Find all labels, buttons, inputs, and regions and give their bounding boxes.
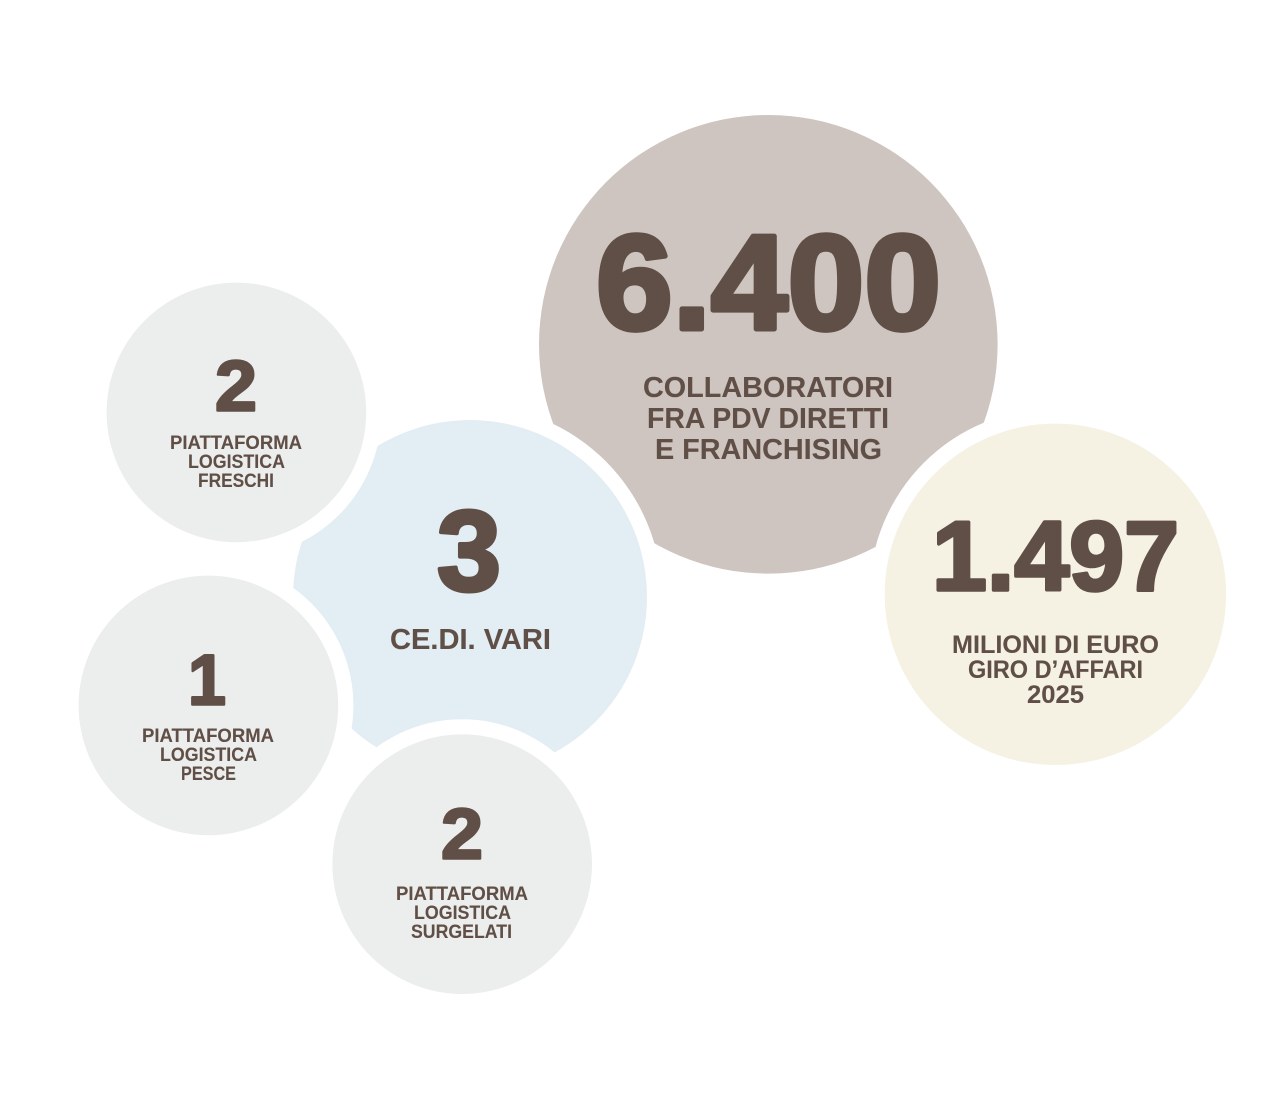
label: pesce: LOGISTICA bbox=[160, 745, 257, 766]
big number: 3: 3 bbox=[437, 488, 501, 615]
label: ce.di. vari: CE.DI. VARI bbox=[390, 624, 551, 656]
label: giro d'affari: 2025 bbox=[1027, 681, 1084, 709]
number: 2 surgelati: 2 bbox=[441, 796, 483, 874]
label: collaboratori: E FRANCHISING bbox=[655, 434, 882, 466]
label: surgelati: SURGELATI bbox=[411, 922, 512, 943]
label: pesce bbox=[142, 726, 274, 785]
label: giro d'affari: GIRO D’AFFARI bbox=[968, 656, 1143, 684]
label: surgelati: LOGISTICA bbox=[414, 903, 511, 924]
label: collaboratori bbox=[643, 372, 893, 466]
label: surgelati: PIATTAFORMA bbox=[396, 884, 528, 905]
label: giro d'affari: MILIONI DI EURO bbox=[952, 631, 1159, 659]
label: freschi: LOGISTICA bbox=[188, 452, 285, 473]
number: 1 pesce: 1 bbox=[188, 642, 226, 720]
label: surgelati bbox=[396, 884, 528, 943]
label: collaboratori: FRA PDV DIRETTI bbox=[647, 403, 889, 435]
panel: collaboratori circle bbox=[278, 115, 1241, 789]
label: freschi: PIATTAFORMA bbox=[170, 433, 302, 454]
number: 2 freschi: 2 bbox=[215, 348, 257, 426]
panel: ce.di. vari circle bbox=[63, 267, 647, 1009]
label: collaboratori: COLLABORATORI bbox=[643, 372, 893, 404]
panel: piattaforma pesce circle bbox=[79, 576, 338, 835]
panel: piattaforma surgelati circle bbox=[332, 734, 592, 994]
label: pesce: PIATTAFORMA bbox=[142, 726, 274, 747]
big number: 6.400: 6.400 bbox=[596, 207, 941, 358]
label: freschi: FRESCHI bbox=[198, 471, 274, 492]
panel: piattaforma freschi circle bbox=[107, 283, 366, 542]
label: pesce: PESCE bbox=[181, 764, 236, 785]
big number: 1.497: 1.497 bbox=[932, 501, 1179, 611]
panel: giro d'affari circle bbox=[885, 424, 1226, 765]
label: freschi bbox=[170, 433, 302, 492]
label: giro d'affari bbox=[952, 631, 1159, 709]
